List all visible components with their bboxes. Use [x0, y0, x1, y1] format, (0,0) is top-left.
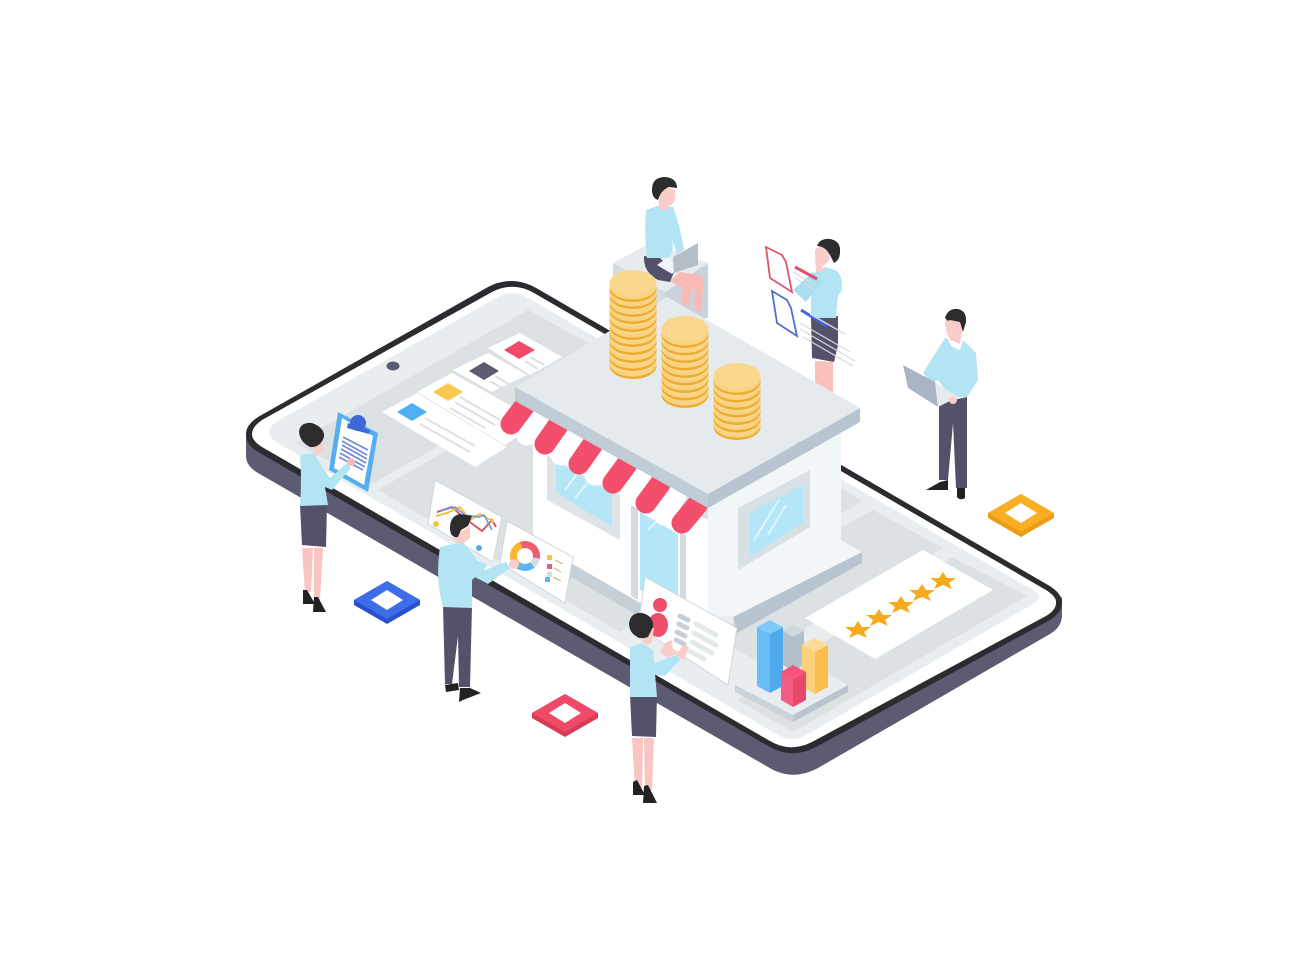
red bar — [781, 665, 806, 707]
collar — [947, 338, 963, 350]
laptop — [903, 365, 958, 407]
donut — [509, 540, 541, 572]
front base band — [533, 541, 708, 656]
line chart panel — [428, 480, 502, 562]
skirt — [300, 504, 327, 547]
blue pen — [801, 310, 827, 326]
platform — [735, 655, 848, 722]
lower screen panel — [378, 385, 780, 632]
smartphone — [246, 281, 1062, 775]
sweater — [438, 542, 488, 608]
hair — [299, 423, 324, 447]
hair — [450, 514, 472, 537]
trousers — [443, 605, 472, 687]
donut legend — [545, 555, 563, 582]
roof — [515, 297, 860, 508]
card red — [488, 333, 562, 375]
card dark — [453, 353, 527, 393]
sweater — [923, 338, 978, 397]
donut chart panel — [500, 521, 573, 603]
side window — [738, 470, 810, 570]
man at charts — [438, 514, 519, 702]
arm — [316, 458, 351, 490]
box seat — [613, 243, 708, 320]
floating document red — [766, 247, 792, 292]
trousers — [939, 397, 967, 488]
blouse — [645, 205, 684, 258]
tile red — [532, 694, 598, 737]
five stars — [845, 572, 956, 638]
face — [945, 320, 962, 344]
review band panel — [737, 557, 1027, 732]
legs — [302, 548, 323, 600]
right wall — [708, 428, 841, 625]
blue bar — [757, 620, 783, 693]
store building — [511, 297, 862, 656]
clip — [347, 415, 370, 434]
floating document blue — [772, 291, 797, 336]
hair — [629, 613, 653, 638]
blouse — [630, 643, 657, 697]
coin stack 2 — [662, 316, 708, 408]
hands — [660, 640, 689, 660]
card yellow — [417, 373, 540, 445]
review card with stars — [805, 550, 993, 659]
red pen — [795, 267, 817, 279]
skirt — [630, 693, 657, 737]
phone black bezel — [246, 281, 1062, 753]
profile panel — [638, 577, 737, 685]
hair — [945, 309, 966, 332]
seated woman on box with laptop — [613, 177, 708, 320]
arm — [465, 552, 510, 584]
woman with floating documents — [766, 239, 855, 395]
shoes — [926, 480, 965, 499]
legs — [632, 738, 654, 790]
clipboard — [329, 412, 378, 492]
store door — [631, 505, 686, 610]
bar chart on platform — [735, 620, 848, 722]
tile yellow — [988, 494, 1054, 537]
phone screen — [269, 293, 1039, 739]
base side ledge — [733, 552, 862, 633]
arm — [650, 650, 680, 676]
tile blue — [354, 581, 420, 624]
coin stacks — [610, 270, 760, 440]
woman at profile panel — [629, 613, 689, 803]
shins and thighs — [670, 272, 704, 312]
yellow bar — [802, 638, 828, 694]
blouse — [300, 453, 328, 506]
front wall — [533, 440, 708, 642]
gray bar — [783, 625, 804, 671]
heels — [303, 590, 326, 612]
awning — [511, 404, 697, 523]
phone side edge — [246, 432, 1062, 775]
man with laptop — [903, 309, 978, 499]
card blue — [382, 393, 507, 467]
person icon — [648, 598, 668, 637]
right screen panel — [720, 510, 943, 680]
skirt — [644, 256, 674, 282]
store window — [547, 455, 620, 540]
camera dot — [386, 362, 400, 370]
phone white screen rim — [252, 287, 1056, 747]
shoes — [445, 683, 481, 702]
sliver panel right of store — [841, 488, 862, 514]
product list cards — [382, 333, 562, 467]
woman at clipboard — [299, 423, 355, 612]
heels — [633, 780, 657, 803]
coin stack 1 — [610, 270, 656, 379]
coin stack 3 — [714, 363, 760, 440]
upper screen panel — [295, 310, 605, 484]
laptop — [657, 243, 698, 274]
